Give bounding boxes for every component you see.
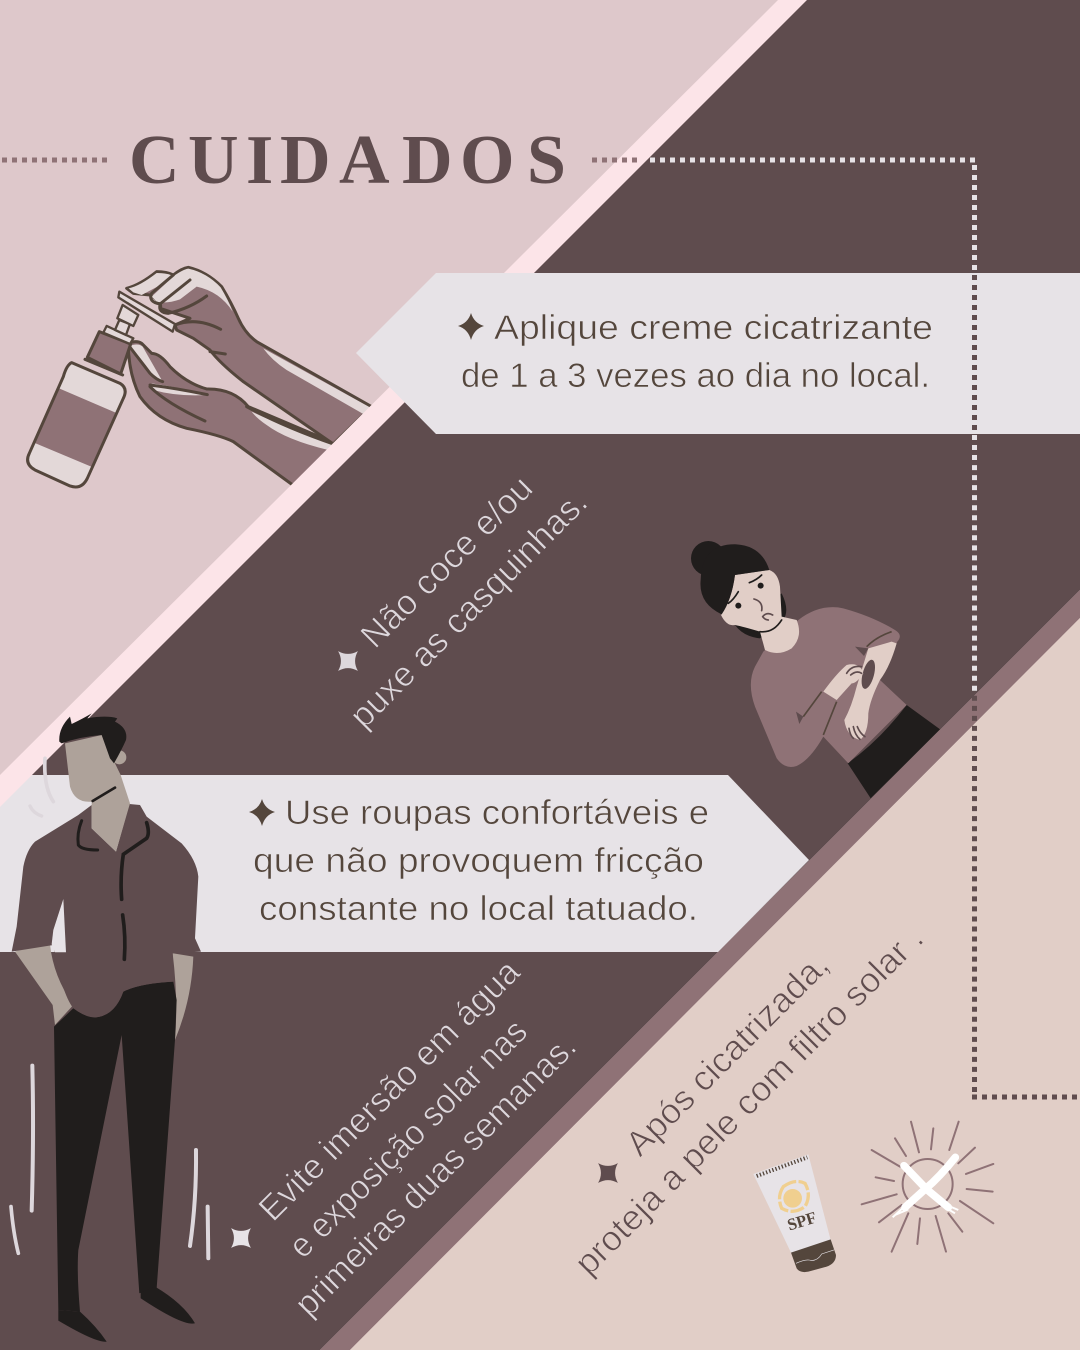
- banner 1: apply cream: [356, 273, 1080, 434]
- illustration: standing man: [11, 713, 208, 1342]
- icon: sparkle: [458, 313, 484, 340]
- icon: SPF sunscreen tube: [753, 1154, 836, 1272]
- text: do not scratch line 2: puxe as casquinhas.: [342, 483, 595, 736]
- text: sunscreen line 1: Após cicatrizada,: [618, 945, 837, 1164]
- icon: sparkle sunscreen: [588, 1153, 628, 1193]
- text: do not scratch line 1: Não coce e/ou: [353, 468, 540, 656]
- icon: SPF sunscreen tube: SPF: [785, 1208, 819, 1234]
- text: clothes line 2: que não provoquem fricção: [253, 842, 704, 880]
- dotted line: left of title: [2, 158, 107, 162]
- dotted line: right of title and frame: [592, 160, 1078, 1097]
- title: CUIDADOS: [129, 122, 566, 199]
- icon: sparkle avoid immersion: [221, 1218, 261, 1258]
- icon: sparkle no scratching: [328, 641, 368, 681]
- icon: sparkle: [249, 799, 275, 826]
- banner 2: comfortable clothes: [0, 775, 809, 952]
- text: sunscreen line 2: proteja a pele com filtro solar .: [567, 918, 931, 1283]
- illustration: woman scratching arm: [691, 541, 940, 798]
- text: avoid immersion line 3: primeiras duas semanas.: [287, 1027, 584, 1324]
- text: avoid immersion line 1: Evite imersão em água: [251, 952, 528, 1229]
- text: clothes line 3: constante no local tatuado.: [259, 890, 698, 928]
- beige lower-right panel: [350, 618, 1080, 1350]
- text: apply cream line 1: Aplique creme cicatrizante: [494, 309, 933, 347]
- pale diagonal stripe: [0, 0, 807, 807]
- text: avoid immersion line 2: e exposição solar nas: [281, 1012, 535, 1266]
- illustration: hands pressing pump bottle: [28, 267, 372, 487]
- text: apply cream line 2: de 1 a 3 vezes ao dia no local.: [461, 357, 930, 395]
- mauve diagonal stripe: [320, 590, 1080, 1350]
- icon: crossed-out sun: [862, 1122, 993, 1252]
- repaint: pale stripe corner over banner: [0, 775, 32, 807]
- text: clothes line 1: Use roupas confortáveis e: [285, 794, 709, 832]
